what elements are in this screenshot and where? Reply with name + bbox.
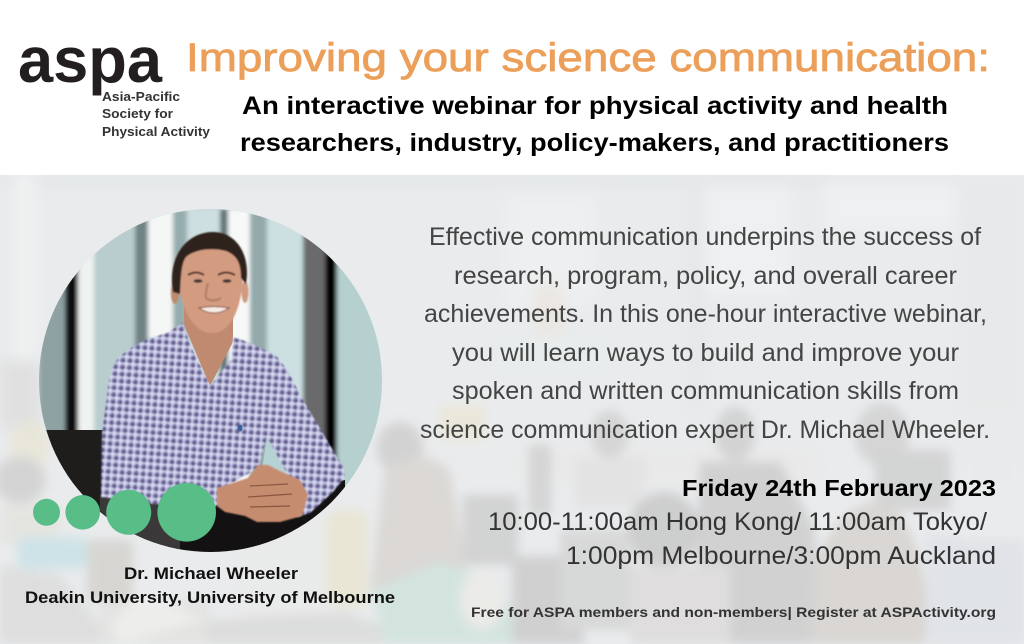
- event times: 1:00pm Melbourne/3:00pm Auckland: [566, 542, 996, 570]
- speaker name and affiliation: Deakin University, University of Melbourne: [25, 588, 395, 607]
- description paragraph: Effective communication underpins the success of: [429, 223, 981, 251]
- event date: Friday 24th February 2023: [682, 475, 996, 501]
- left audience: [9, 424, 50, 464]
- subtitle: researchers, industry, policy-makers, and practitioners: [240, 129, 949, 157]
- title: Improving your science communication:: [186, 36, 990, 80]
- logo tagline: Society for: [102, 106, 173, 121]
- speaker name and affiliation: Dr. Michael Wheeler: [124, 564, 298, 583]
- teal gap under arm: [262, 439, 288, 474]
- speaker photo: [39, 209, 382, 560]
- white-shirt person: [232, 510, 335, 630]
- trousers: [100, 480, 345, 560]
- right audience: [855, 403, 909, 467]
- logo tagline: Physical Activity: [102, 124, 211, 139]
- description paragraph: achievements. In this one-hour interactive webinar,: [424, 300, 987, 328]
- subtitle: An interactive webinar for physical activity and health: [242, 92, 948, 120]
- speaker name and affiliation: [25, 564, 395, 607]
- chair: [46, 430, 106, 516]
- neck: [184, 300, 233, 386]
- blurred classroom background: [0, 175, 1024, 644]
- shirt logo: [238, 424, 242, 432]
- logo: aspa: aspa: [18, 24, 162, 96]
- event times: [488, 508, 996, 570]
- green decorative circles: [33, 483, 216, 542]
- window and pillar stripes: [39, 209, 382, 552]
- clasped hands: [217, 465, 308, 522]
- event times: 10:00-11:00am Hong Kong/ 11:00am Tokyo/: [488, 508, 987, 536]
- central audience: [529, 445, 551, 515]
- description paragraph: research, program, policy, and overall career: [454, 262, 957, 290]
- right of photo: [327, 510, 367, 607]
- description paragraph: spoken and written communication skills from: [452, 377, 959, 405]
- head: [171, 232, 248, 333]
- description paragraph: [420, 223, 990, 444]
- description paragraph: science communication expert Dr. Michael Wheeler.: [420, 416, 990, 444]
- description paragraph: you will learn ways to build and improve your: [452, 339, 959, 367]
- registration note: Free for ASPA members and non-members| Register at ASPActivity.org: [471, 604, 996, 620]
- logo tagline: Asia-Pacific: [102, 89, 180, 104]
- subtitle: [240, 92, 949, 157]
- logo: aspa: [18, 24, 211, 139]
- logo tagline: [102, 89, 211, 139]
- header band: [0, 0, 1024, 175]
- shirt: [101, 323, 345, 517]
